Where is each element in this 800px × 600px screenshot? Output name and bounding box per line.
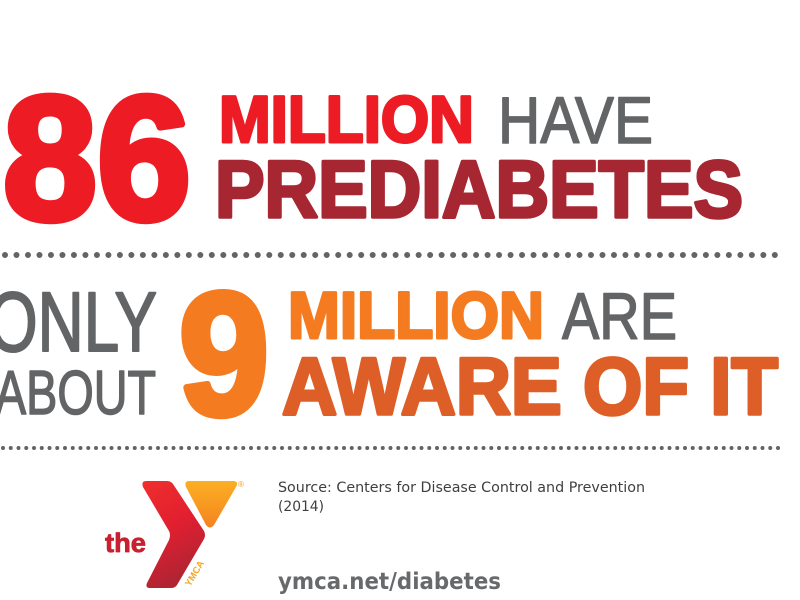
source text: (2014) bbox=[278, 499, 324, 515]
text: million: MILLION bbox=[219, 82, 474, 156]
source text: Source: Centers for Disease Control and Prevention bbox=[278, 480, 645, 496]
heading: million are bbox=[288, 278, 677, 353]
text: are: ARE bbox=[562, 279, 677, 353]
text: only about bbox=[0, 275, 157, 428]
heading: aware of it: AWARE OF IT bbox=[282, 342, 778, 432]
text: YMCA: YMCA bbox=[183, 559, 207, 589]
dotted divider bottom bbox=[3, 446, 780, 450]
dotted divider top bbox=[5, 252, 777, 258]
text: million: MILLION bbox=[288, 278, 544, 352]
text: have: HAVE bbox=[498, 83, 653, 157]
statistic: 9: 9 bbox=[179, 256, 269, 451]
heading: million have bbox=[219, 82, 653, 157]
icon: gold Y arm bbox=[185, 481, 237, 528]
logo: the YMCA bbox=[105, 480, 244, 589]
text: the: the bbox=[105, 528, 146, 558]
text: registered mark: ® bbox=[238, 480, 244, 489]
heading: prediabetes: PREDIABETES bbox=[215, 145, 743, 235]
url: ymca.net/diabetes: ymca.net/diabetes bbox=[278, 569, 501, 595]
icon: red Y arm bbox=[142, 481, 205, 588]
statistic: 86: 86 bbox=[3, 61, 191, 257]
text: about: ABOUT bbox=[0, 359, 156, 428]
